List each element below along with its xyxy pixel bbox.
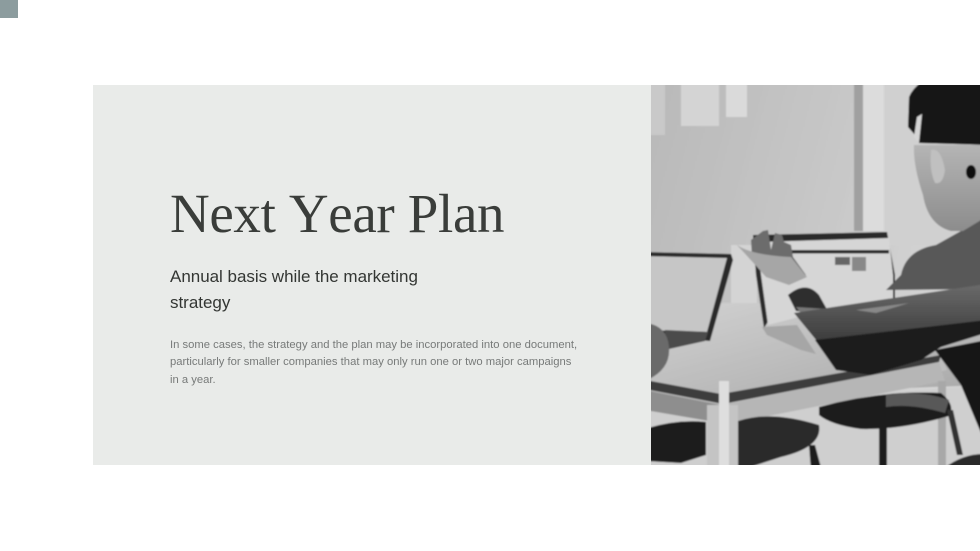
body text: In some cases, the strategy and the plan may be incorporated into one document, xyxy=(170,338,577,350)
table edge and legs xyxy=(645,355,947,471)
corner accent square xyxy=(0,0,18,18)
left foreground object xyxy=(645,323,669,381)
body text: particularly for smaller companies that may only run one or two major campaigns xyxy=(170,356,571,368)
title: Next Year Plan xyxy=(170,183,504,244)
floor xyxy=(645,385,980,471)
subtitle: strategy xyxy=(170,292,230,312)
hand and sleeve xyxy=(737,230,839,316)
subtitle: Annual basis while the marketing xyxy=(170,267,418,286)
body text: in a year. xyxy=(170,374,216,386)
photo: person at a table with laptops xyxy=(651,85,980,465)
left laptop xyxy=(645,252,733,349)
wall xyxy=(645,79,980,471)
right laptop xyxy=(753,232,895,354)
person body xyxy=(794,217,980,445)
body text xyxy=(170,338,577,386)
stools xyxy=(645,393,980,471)
person head xyxy=(908,79,980,231)
panel: text background xyxy=(92,85,651,465)
subtitle xyxy=(170,267,418,312)
table top xyxy=(645,303,980,395)
